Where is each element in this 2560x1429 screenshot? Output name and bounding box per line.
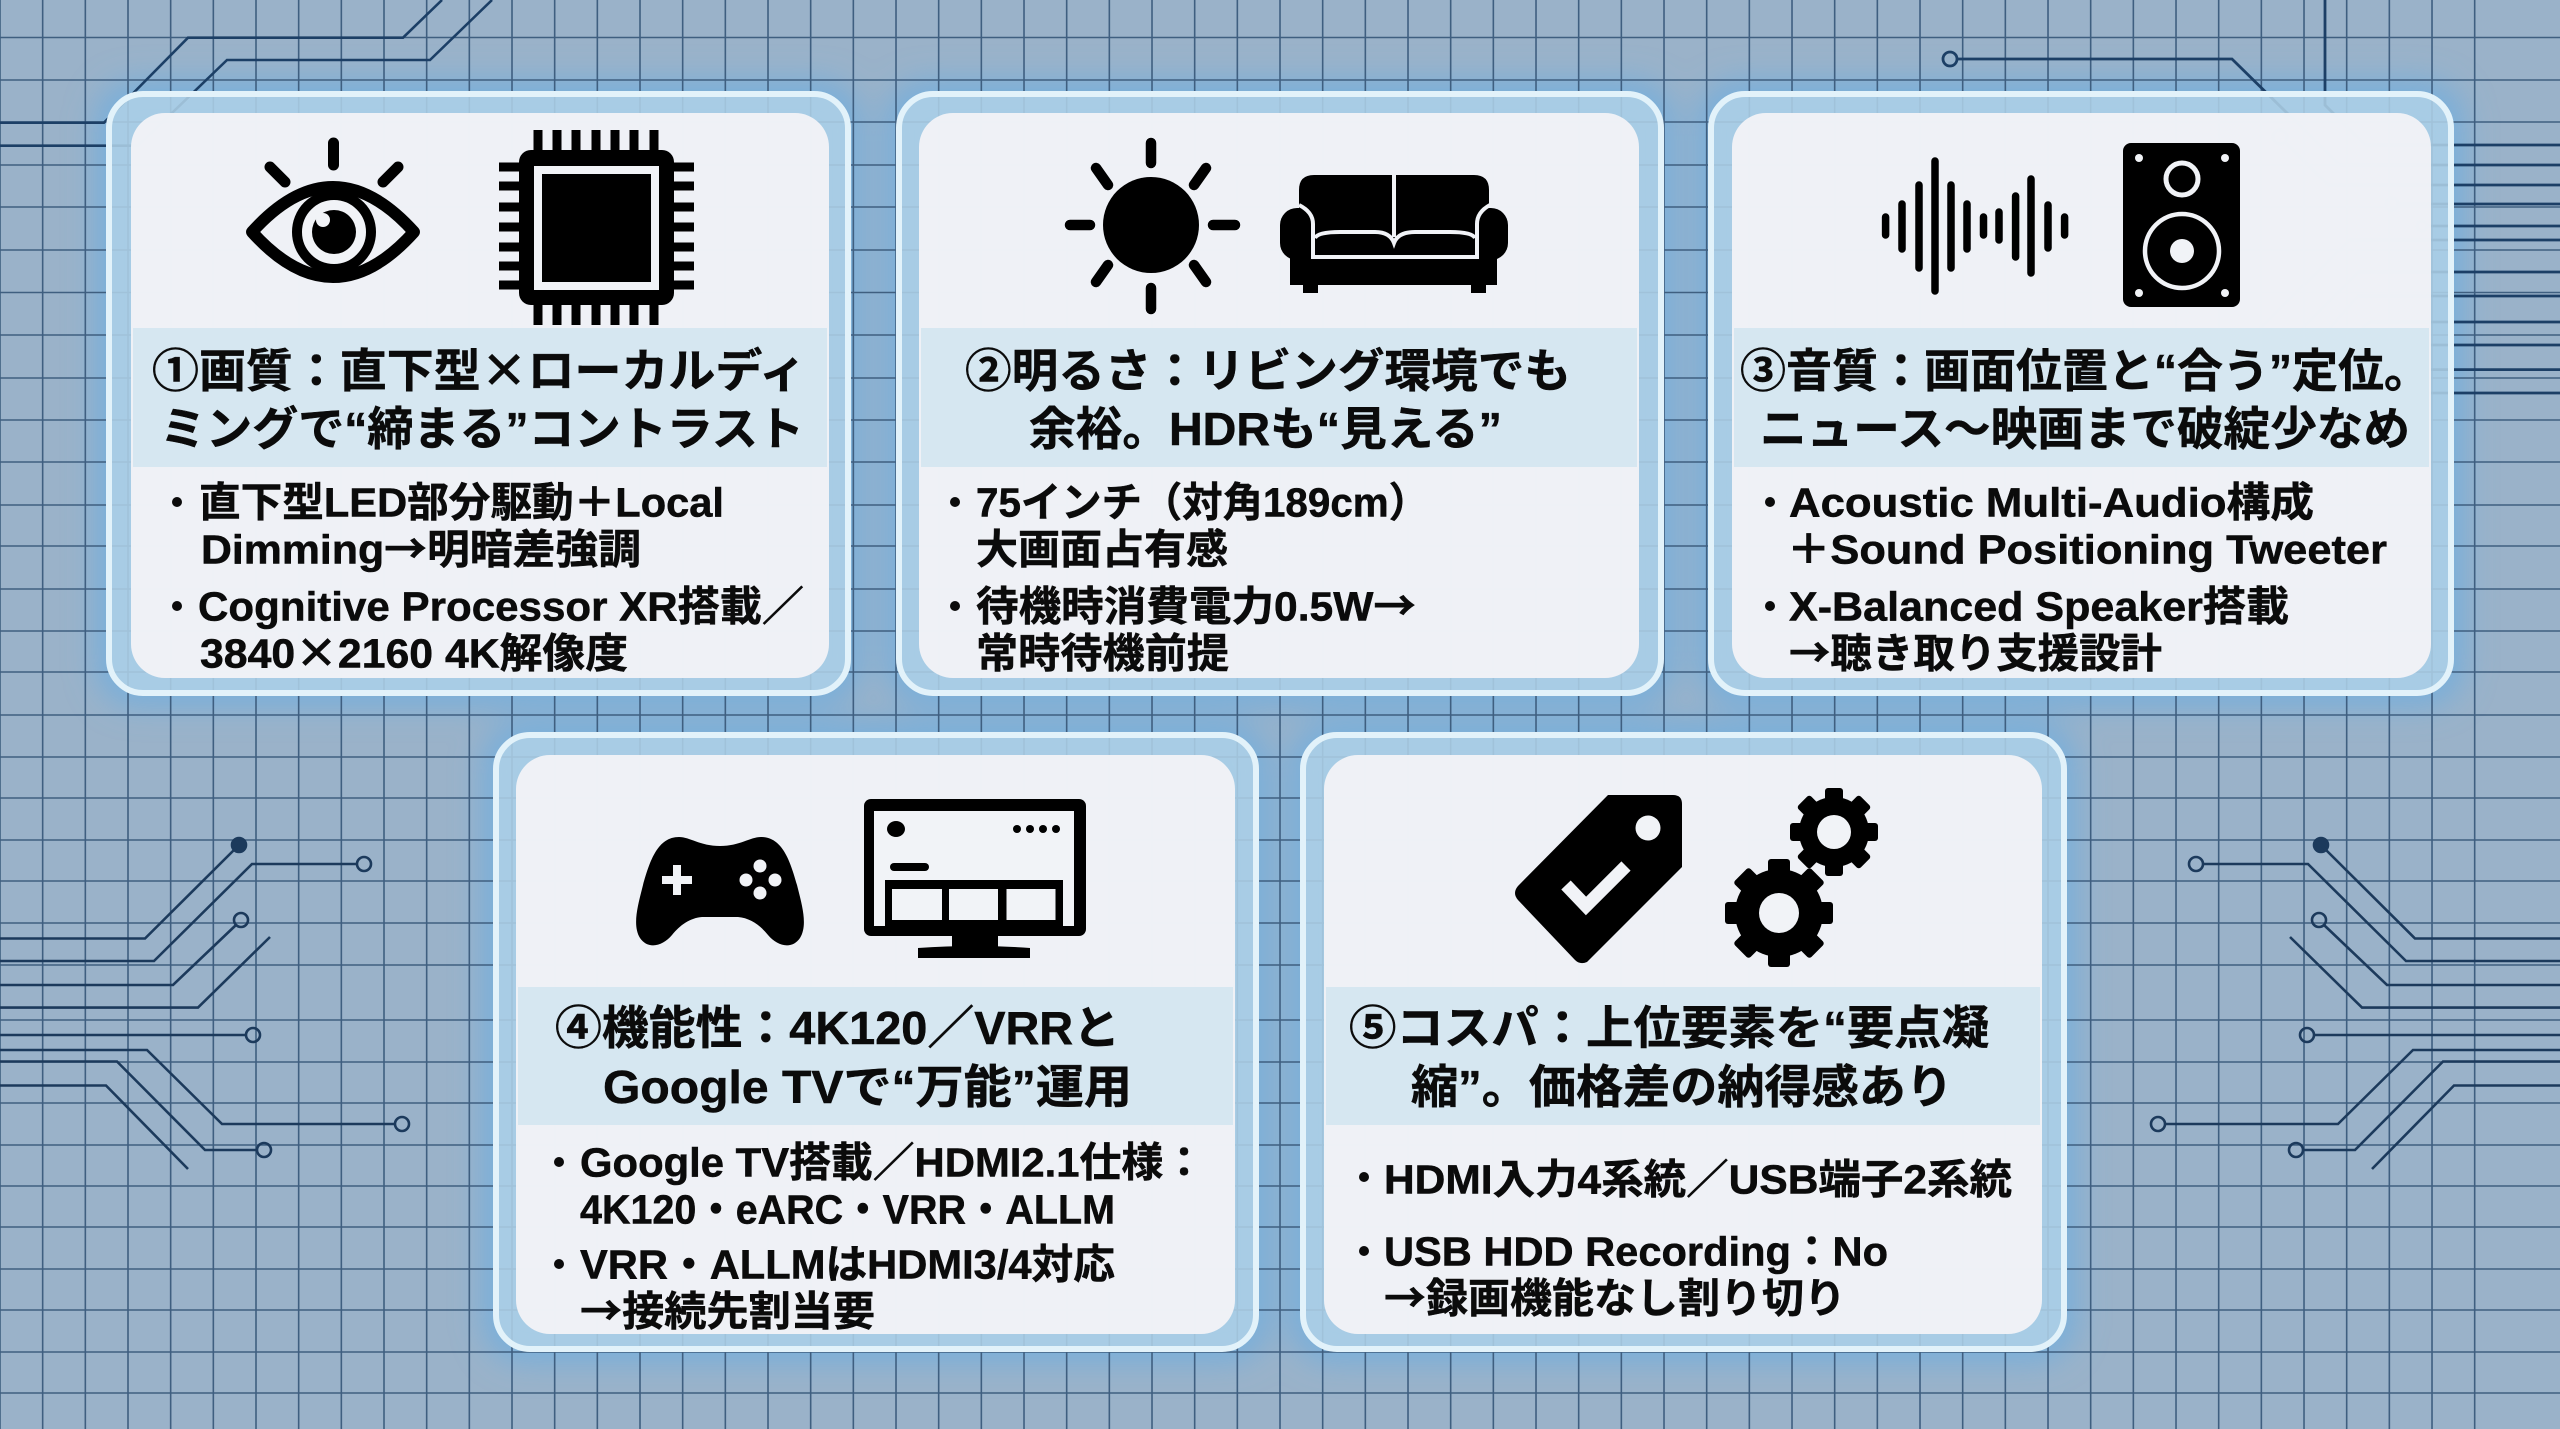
panel 1 card xyxy=(131,113,829,678)
icon: game controller xyxy=(636,837,804,945)
panel 2 bullets: 75インチ（対角189cm） xyxy=(976,480,1429,526)
panel 1 bullets: Cognitive Processor XR搭載／ xyxy=(198,584,804,630)
panel 2 heading: 余裕。HDRも“見える” xyxy=(1029,403,1502,455)
panel 1 bullets: 直下型LED部分駆動＋Local xyxy=(199,480,724,526)
panel 3 heading band xyxy=(1734,328,2429,467)
panel 1 heading: ①画質：直下型×ローカルディ xyxy=(152,335,806,401)
icon: speaker xyxy=(2123,143,2240,307)
panel 4 heading: ④機能性：4K120／VRRと xyxy=(555,1002,1120,1054)
panel 4 bullets: VRR・ALLMはHDMI3/4対応 xyxy=(580,1242,1115,1288)
panel 2 frame xyxy=(899,94,1661,693)
panel 3 bullets: Acoustic Multi-Audio構成 xyxy=(1789,480,2314,526)
panel 5 bullets xyxy=(1359,1156,2012,1324)
icon: gears xyxy=(1725,788,1878,967)
panel 1 bullets: 3840×2160 4K解像度 xyxy=(200,620,628,680)
icon: sound wave xyxy=(1886,161,2065,291)
panel 4: features xyxy=(496,735,1256,1349)
panel 3: sound xyxy=(1711,94,2451,693)
panel 4 bullets xyxy=(554,1140,1205,1338)
panel 3 heading: ③音質：画面位置と“合う”定位。 xyxy=(1740,345,2430,397)
icon: price tag with check xyxy=(1515,795,1682,963)
panel 1: picture quality xyxy=(109,94,848,693)
icon: eye xyxy=(252,143,414,277)
icon: sun xyxy=(1070,143,1235,309)
panel 5 heading band xyxy=(1326,987,2040,1125)
icon: processor chip xyxy=(499,130,694,325)
panel 3 card xyxy=(1732,113,2431,678)
panel 2 heading band xyxy=(921,328,1637,467)
circuit traces: lower right xyxy=(2151,838,2560,1169)
panel 1 heading xyxy=(152,335,806,455)
panel 3 heading xyxy=(1740,345,2430,455)
panel 1 frame xyxy=(109,94,848,693)
panel 4 heading xyxy=(555,1002,1132,1113)
panel 4 bullets: Google TV搭載／HDMI2.1仕様： xyxy=(580,1140,1205,1186)
panel 4 heading: Google TVで“万能”運用 xyxy=(603,1061,1132,1113)
panel 2 heading: ②明るさ：リビング環境でも xyxy=(965,345,1571,397)
panel 4 bullets: →接続先割当要 xyxy=(580,1278,875,1338)
panel 1 heading: ミングで“締まる”コントラスト xyxy=(160,403,804,455)
panel 3 frame xyxy=(1711,94,2451,693)
panel 1 bullets xyxy=(172,480,804,680)
panel 5 bullets: →録画機能なし割り切り xyxy=(1384,1264,1846,1324)
panel 2 bullets: 大画面占有感 xyxy=(976,526,1228,572)
panel 2 bullets: 待機時消費電力0.5W → xyxy=(976,572,1416,632)
panel 5 heading xyxy=(1349,1002,1989,1113)
circuit traces: top right xyxy=(1943,0,2560,393)
panel 5 card xyxy=(1324,755,2042,1334)
panel 2 bullets xyxy=(950,480,1429,676)
panel 3 heading: ニュース～映画まで破綻少なめ xyxy=(1760,403,2410,455)
panel 4 heading band xyxy=(518,987,1233,1125)
panel 3 bullets: →聴き取り支援設計 xyxy=(1789,620,2162,680)
panel 2 card xyxy=(919,113,1639,678)
panel 2 bullets: 常時待機前提 xyxy=(976,630,1229,676)
panel 4 card xyxy=(516,755,1235,1334)
panel 3 bullets xyxy=(1765,480,2387,680)
panel 5 bullets: HDMI入力4系統／USB端子2系統 xyxy=(1384,1156,2012,1202)
panel 3 bullets: ＋Sound Positioning Tweeter xyxy=(1787,526,2387,572)
circuit traces: lower left xyxy=(0,838,409,1169)
circuit traces: top left xyxy=(0,0,492,146)
panel 2: brightness xyxy=(899,94,1661,693)
panel 4 frame xyxy=(496,735,1256,1349)
panel 2 heading xyxy=(965,345,1571,455)
panel 5 heading: ⑤コスパ：上位要素を“要点凝 xyxy=(1349,1002,1989,1054)
icon: sofa xyxy=(1280,175,1508,293)
panel 1 heading band xyxy=(133,328,827,467)
panel 5: value xyxy=(1303,735,2064,1349)
panel 4 bullets: 4K120・eARC・VRR・ALLM xyxy=(580,1186,1115,1232)
panel 1 bullets: Dimming→明暗差強調 xyxy=(201,516,641,576)
panel 3 bullets: X-Balanced Speaker搭載 xyxy=(1789,584,2289,630)
panel 5 heading: 縮”。価格差の納得感あり xyxy=(1411,1061,1953,1113)
panel 5 frame xyxy=(1303,735,2064,1349)
icon: smart TV xyxy=(864,799,1086,958)
panel 5 bullets: USB HDD Recording：No xyxy=(1384,1228,1888,1274)
